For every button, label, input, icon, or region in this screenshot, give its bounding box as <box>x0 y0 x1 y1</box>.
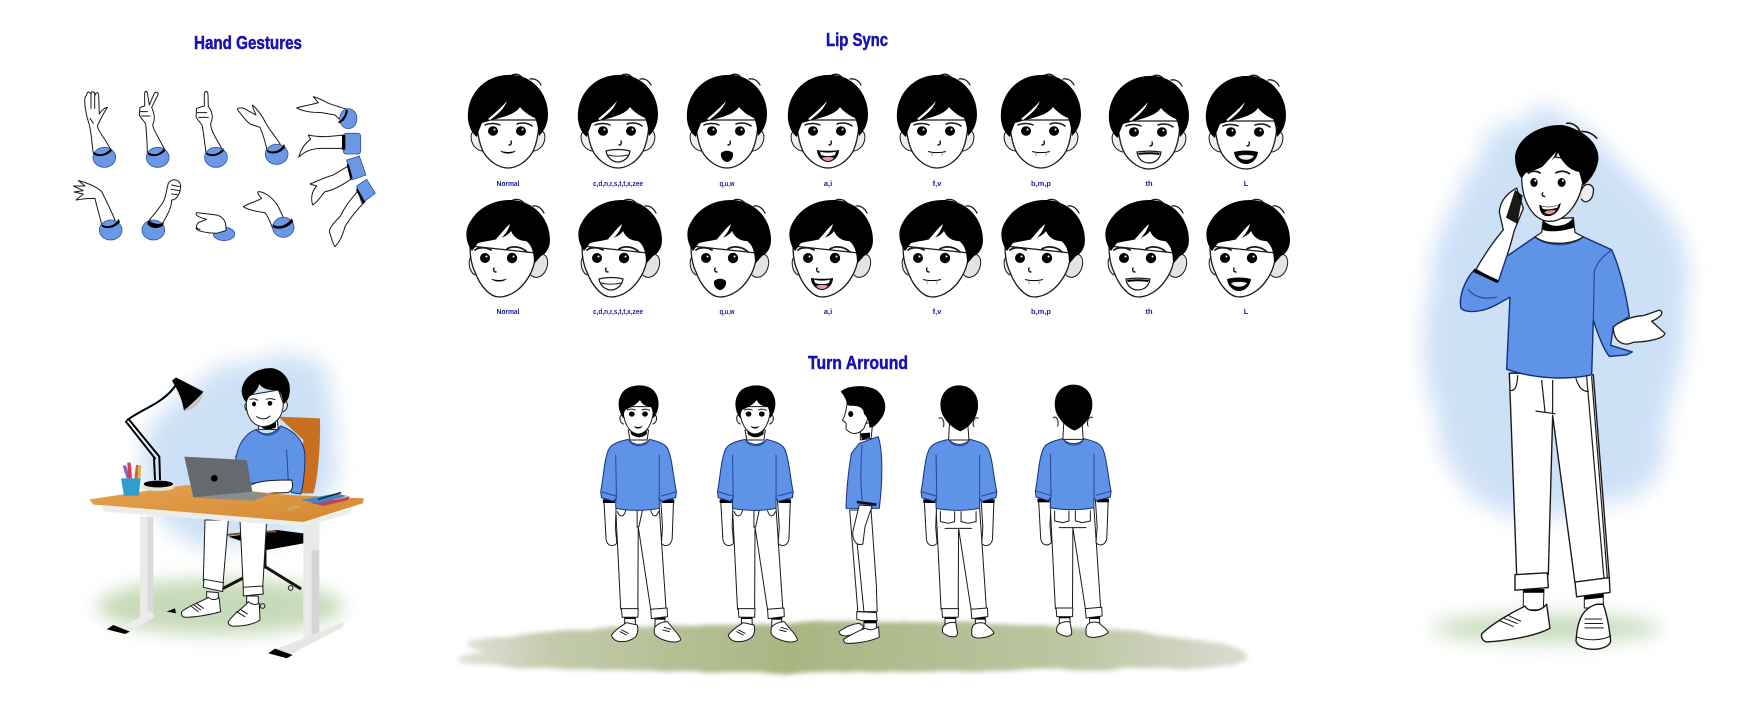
face: L side <box>1206 199 1290 297</box>
desk top <box>89 485 364 522</box>
icon: open hand tilted <box>237 105 288 164</box>
face: b,m,p side <box>1001 199 1085 297</box>
icon: open hand low <box>243 192 294 237</box>
face: normal front <box>468 74 548 168</box>
labels row 1: b,m,p <box>1031 179 1051 188</box>
face: q,u,w side <box>687 199 771 297</box>
labels row 1: L <box>1244 179 1249 188</box>
labels row 1: Normal <box>496 179 520 188</box>
pen cup <box>121 463 141 496</box>
turnaround figures <box>601 385 1111 643</box>
face: th front <box>1109 75 1189 169</box>
face: b,m,p front <box>1001 74 1081 168</box>
labels row 1 <box>496 179 1249 188</box>
pants <box>1509 373 1610 597</box>
labels row 1: q,u,w <box>720 179 735 188</box>
panel: phone call hero figure <box>1425 105 1688 649</box>
panel: hand gestures <box>73 33 375 247</box>
chair <box>223 417 320 608</box>
icon: arm reaching left 1 <box>297 97 357 129</box>
panel: turn around <box>457 353 1248 672</box>
open hand <box>1613 310 1665 344</box>
head <box>1515 123 1598 243</box>
labels row 2 <box>496 307 1249 316</box>
green ground wash <box>1432 614 1662 642</box>
person <box>181 368 305 626</box>
face: a,i front <box>788 74 868 168</box>
face: c,d,n side <box>578 199 662 297</box>
face: L front <box>1206 75 1286 169</box>
heading: Hand Gestures: Hand Gestures <box>194 33 302 53</box>
face: f,v side <box>899 199 983 297</box>
icon: arm reaching left 2 <box>299 133 361 157</box>
shoes and socks <box>1482 589 1611 649</box>
books <box>287 493 349 511</box>
labels row 1: th <box>1145 179 1153 188</box>
figure: side view <box>839 386 885 643</box>
heading: Lip Sync: Lip Sync <box>826 30 888 50</box>
face: f,v front <box>897 74 977 168</box>
desk legs <box>107 517 343 658</box>
figure: front view <box>601 385 681 642</box>
ground wash <box>457 622 1248 672</box>
blue watercolor background <box>143 353 337 547</box>
heading: Turn Arround: Turn Arround <box>808 353 908 373</box>
face: normal side <box>466 199 550 297</box>
phone <box>1506 190 1523 224</box>
labels row 2: q,u,w <box>720 307 735 316</box>
panel: desk scene <box>89 353 364 658</box>
icon: arm reaching left 3 <box>310 156 366 205</box>
lamp <box>126 377 203 491</box>
laptop <box>184 457 270 501</box>
labels row 2: f,v <box>933 307 942 316</box>
labels row 1: f,v <box>933 179 942 188</box>
face row: front view <box>468 74 1286 169</box>
labels row 2: L <box>1244 307 1249 316</box>
face: q,u,w front <box>687 74 767 168</box>
labels row 1: a,i <box>824 179 832 188</box>
figure: back view <box>1035 385 1111 637</box>
face: a,i side <box>789 199 873 297</box>
icon: pointing up <box>196 91 227 167</box>
face: c,d,n front <box>578 74 658 168</box>
blue watercolor background <box>1425 105 1688 515</box>
icon: relaxed hand up <box>73 181 122 240</box>
icon: pointing sideways <box>196 213 235 241</box>
panel: lip sync <box>466 30 1290 316</box>
labels row 2: c,d,n,r,s,t,t,x,zee <box>593 307 643 316</box>
icon: fist raised <box>142 180 181 240</box>
gesture icons <box>73 91 375 247</box>
desk underside <box>102 505 353 527</box>
labels row 2: a,i <box>824 307 832 316</box>
labels row 2: th <box>1145 307 1153 316</box>
labels row 2: b,m,p <box>1031 307 1051 316</box>
face row: three-quarter view <box>466 199 1290 297</box>
figure: back three-quarter view <box>921 385 997 638</box>
figure: three-quarter view <box>717 385 797 642</box>
face: th side <box>1105 199 1189 297</box>
shirt <box>1460 188 1632 378</box>
labels row 2: Normal <box>496 307 520 316</box>
icon: open palm <box>85 92 116 167</box>
icon: arm hanging <box>329 179 375 247</box>
labels row 1: c,d,n,r,s,t,t,x,zee <box>593 179 643 188</box>
icon: peace sign <box>139 91 169 167</box>
green ground wash <box>97 578 343 635</box>
